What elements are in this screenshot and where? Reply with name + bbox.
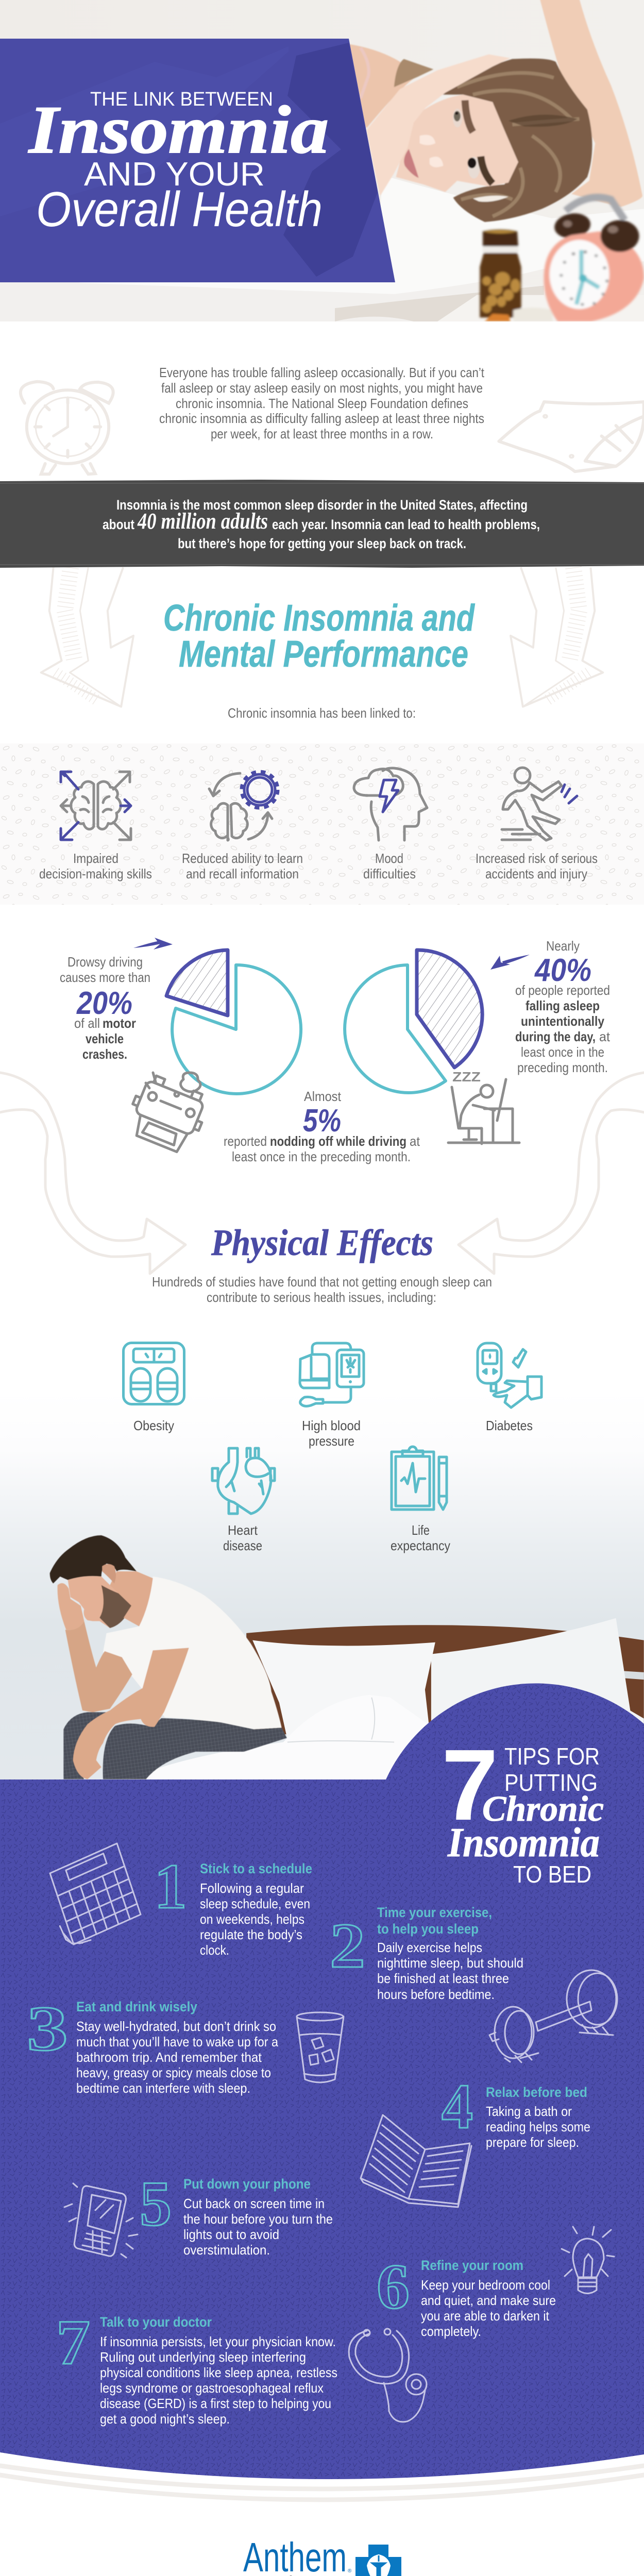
wall background behind lower effects — [0, 1391, 644, 1780]
tip 6: refine your room: completely. — [421, 2324, 481, 2339]
stat text: 5%: 5% — [303, 1103, 341, 1139]
label: heart disease: Heart — [228, 1522, 258, 1538]
icon: blood pressure monitor — [300, 1343, 364, 1406]
tip 7: talk to your doctor: If insomnia persists, let your physician know. — [100, 2334, 336, 2349]
faded brush strokes under tips panel — [0, 2466, 644, 2500]
tip 7: talk to your doctor: disease (GERD) is a first step to helping you — [100, 2396, 331, 2411]
label: high blood pressure: High blood — [302, 1418, 361, 1433]
icon: faded alarm clock — [21, 382, 113, 474]
label: impaired decision-making — [39, 851, 152, 882]
title text — [28, 89, 329, 237]
icon: weight scale — [124, 1343, 184, 1404]
label: reduced ability: Reduced ability to learn — [182, 851, 303, 866]
tip 6: refine your room — [377, 2251, 556, 2339]
intro paragraph: chronic insomnia as difficulty falling asleep at least three nights — [159, 411, 484, 426]
label: mood difficulties: Mood — [375, 851, 403, 866]
icon: clipboard with heartbeat — [392, 1447, 447, 1510]
heading: Chronic Insomnia and Mental Performance: Mental Performance — [179, 634, 468, 675]
label: diabetes: Diabetes — [486, 1418, 533, 1433]
heading: Chronic Insomnia and Mental Performance: Chronic Insomnia and — [163, 598, 476, 639]
label: increased risk: accidents and injury — [485, 866, 587, 882]
title text: Insomnia — [28, 92, 329, 167]
title panel — [0, 39, 395, 282]
subheading: Chronic insomnia has been linked to: — [228, 705, 416, 721]
physical effects intro: contribute to serious health issues, including: — [207, 1290, 436, 1305]
title text: THE LINK BETWEEN — [90, 89, 273, 110]
stat text: 40%: unintentionally — [521, 1013, 604, 1029]
arrow: pointing to 20% slice — [133, 938, 173, 950]
banner: 40 million adults: 40 million adults — [137, 509, 268, 534]
heading: 7 tips: TO BED — [513, 1861, 591, 1888]
intro paragraph: fall asleep or stay asleep easily on most nights, you might have — [161, 380, 483, 396]
faded curved arrow left — [0, 1073, 185, 1274]
photo: man sitting with head in hand — [50, 1535, 287, 1779]
label: heart disease: disease — [223, 1538, 262, 1553]
tip 7: talk to your doctor: get a good night’s sleep. — [100, 2411, 230, 2427]
stat text: 20%: 20% — [76, 986, 132, 1021]
icon: person asleep at desk — [448, 1069, 519, 1144]
tip 3: eat and drink wisely: bathroom trip. And remember that — [76, 2049, 262, 2065]
tip 3: eat and drink wisely: much that you’ll have to wake up for a — [76, 2034, 278, 2049]
tip 2: time your exercise: to help you sleep — [377, 1921, 479, 1937]
tip 6: refine your room: Keep your bedroom cool — [421, 2277, 550, 2293]
icon: glass of ice water — [297, 2012, 344, 2082]
tip 4: relax before bed: prepare for sleep. — [486, 2134, 579, 2150]
physical effects intro: Hundreds of studies have found that not getting enough sleep can — [152, 1274, 492, 1290]
tip 4: relax before bed — [442, 2071, 590, 2150]
stat text: 40%: at — [599, 1029, 611, 1044]
big faded arrow right — [511, 567, 603, 707]
icon: person slipping — [502, 768, 577, 840]
tip 3: eat and drink wisely — [27, 1993, 278, 2096]
tip 7: talk to your doctor — [56, 2307, 337, 2427]
tip 3: eat and drink wisely: Stay well-hydrated, but don’t drink so — [76, 2019, 276, 2034]
icon: open book — [361, 2115, 471, 2207]
banner: 40 million adults: about — [103, 517, 134, 532]
stat text: 20%: of all — [74, 1015, 100, 1031]
label: impaired decision-making: decision-making skills — [39, 866, 152, 882]
tip 3: eat and drink wisely: heavy, greasy or spicy meals close to — [76, 2065, 271, 2080]
intro paragraph: Everyone has trouble falling asleep occasionally. But if you can’t — [159, 365, 485, 380]
title text: Overall Health — [36, 182, 323, 237]
stat text: 40%: of people reported — [515, 982, 610, 998]
tip 1: stick to a schedule: Following a regular — [200, 1880, 304, 1896]
tip 1: stick to a schedule: 1 — [154, 1851, 187, 1922]
tip 5: put down your phone: the hour before you turn the — [183, 2211, 333, 2227]
icon: brain and gear — [209, 772, 277, 840]
label: increased risk — [476, 851, 598, 882]
arrow: pointing to 40% slice — [490, 955, 530, 970]
label: increased risk: Increased risk of serious — [476, 851, 598, 866]
big faded arrow left — [41, 567, 133, 707]
label: impaired decision-making: Impaired — [73, 851, 118, 866]
panel: 7 tips — [0, 1683, 644, 2500]
stat text: 40% — [515, 938, 611, 1075]
tip 2: time your exercise: Time your exercise, — [377, 1905, 492, 1920]
stat text: 40%: falling asleep — [526, 998, 600, 1013]
tip 5: put down your phone: overstimulation. — [183, 2242, 270, 2258]
heading: 7 tips: Insomnia — [447, 1820, 600, 1866]
heading: 7 tips — [442, 1728, 604, 1888]
stat text: 40%: preceding month. — [517, 1060, 608, 1075]
stat text: 5%: nodding off while driving — [270, 1133, 406, 1149]
icon: calendar — [43, 1843, 142, 1950]
label: reduced ability — [182, 851, 303, 882]
panel: linked conditions — [0, 743, 644, 905]
tip 1: stick to a schedule: sleep schedule, even — [200, 1896, 310, 1911]
pie chart: 40% falling asleep — [345, 950, 482, 1093]
tip 1: stick to a schedule: clock. — [200, 1942, 229, 1958]
tip 6: refine your room: and quiet, and make sure — [421, 2293, 556, 2308]
icon: person asleep at desk: ZZZ — [452, 1069, 481, 1084]
label: life expectancy: expectancy — [391, 1538, 450, 1553]
heading: Chronic Insomnia and Mental Performance — [163, 598, 476, 675]
stat text: 20% — [60, 954, 150, 1062]
label: life expectancy — [391, 1522, 450, 1553]
faded curved arrow right — [459, 1073, 644, 1274]
label: heart disease — [223, 1522, 262, 1553]
intro paragraph — [159, 365, 485, 442]
stat text: 40%: 40% — [534, 953, 591, 988]
stat text: 5%: Almost — [304, 1089, 342, 1104]
tip 5: put down your phone: Cut back on screen time in — [183, 2196, 325, 2211]
icon: light bulb — [562, 2227, 614, 2294]
icon: faded pillow — [499, 402, 644, 471]
photo: bed with pillows — [127, 1618, 644, 1780]
tip 4: relax before bed: Taking a bath or — [486, 2104, 572, 2119]
tip 7: talk to your doctor: Talk to your doctor — [100, 2314, 212, 2330]
icon: heart — [212, 1448, 275, 1514]
heading: Physical Effects: Physical Effects — [211, 1222, 433, 1263]
tip 1: stick to a schedule — [154, 1851, 312, 1958]
heading: 7 tips: PUTTING — [504, 1769, 598, 1796]
label: high blood pressure — [302, 1418, 361, 1449]
tip 2: time your exercise: nighttime sleep, but should — [377, 1955, 523, 1971]
heading: 7 tips: TIPS FOR — [504, 1743, 600, 1770]
stat text: 40%: least once in the — [521, 1044, 604, 1060]
tip 5: put down your phone: lights out to avoid — [183, 2227, 279, 2242]
stat text: 20%: Drowsy driving — [67, 954, 143, 970]
tip 2: time your exercise: Daily exercise helps — [377, 1940, 482, 1955]
tip 1: stick to a schedule: on weekends, helps — [200, 1911, 304, 1927]
tip 3: eat and drink wisely: 3 — [27, 1993, 68, 2064]
tip 1: stick to a schedule: Stick to a schedule — [200, 1861, 312, 1876]
stat text: 20%: crashes. — [82, 1046, 127, 1062]
label: obesity: Obesity — [133, 1418, 174, 1433]
label: mood difficulties — [363, 851, 416, 882]
stat text: 5% — [224, 1089, 420, 1164]
tip 4: relax before bed: 4 — [442, 2071, 473, 2142]
banner: 40 million adults: Insomnia is the most common sleep disorder in the United States, affecting — [116, 497, 528, 513]
tip 7: talk to your doctor: 7 — [56, 2307, 90, 2378]
icon: brain with arrows — [61, 772, 131, 840]
stat text: 5%: at — [410, 1133, 420, 1149]
tip 7: talk to your doctor: physical conditions like sleep apnea, restless — [100, 2365, 337, 2380]
tip 6: refine your room: Refine your room — [421, 2258, 523, 2273]
icon: glucose meter and hand — [478, 1343, 541, 1408]
tip 2: time your exercise — [330, 1905, 523, 2002]
tip 6: refine your room: you are able to darken it — [421, 2308, 550, 2324]
pie chart: 20% drowsy driving — [166, 950, 301, 1094]
icon: dumbbell — [489, 1970, 617, 2062]
tip 5: put down your phone: 5 — [140, 2168, 172, 2239]
tip 5: put down your phone: Put down your phone — [183, 2176, 311, 2192]
tip 7: talk to your doctor: legs syndrome or gastroesophageal reflux — [100, 2380, 324, 2396]
label: reduced ability: and recall information — [186, 866, 299, 882]
stat text: 20%: vehicle — [86, 1031, 124, 1046]
intro paragraph: chronic insomnia. The National Sleep Foundation defines — [176, 396, 468, 411]
tip 6: refine your room: 6 — [377, 2251, 410, 2322]
banner: 40 million adults: each year. Insomnia can lead to health problems, — [272, 517, 540, 532]
stat text: 5%: least once in the preceding month. — [232, 1149, 411, 1164]
title text: AND YOUR — [84, 155, 265, 193]
intro paragraph: per week, for at least three months in a row. — [211, 426, 433, 442]
hero photo: woman in bed with alarm clock and pill bottle — [0, 0, 644, 321]
tip 7: talk to your doctor: Ruling out underlying sleep interfering — [100, 2349, 306, 2365]
tip 5: put down your phone — [140, 2168, 333, 2258]
tip 2: time your exercise: be finished at least three — [377, 1971, 509, 1986]
tip 2: time your exercise: 2 — [330, 1910, 365, 1981]
banner: 40 million adults: but there’s hope for getting your sleep back on track. — [178, 536, 466, 551]
icon: head with storm cloud — [354, 768, 427, 840]
icon: smoke and impact lines — [146, 1073, 200, 1096]
stat text: 5%: reported — [224, 1133, 267, 1149]
tip 4: relax before bed: reading helps some — [486, 2119, 590, 2134]
tip 1: stick to a schedule: regulate the body’s — [200, 1927, 302, 1942]
tip 2: time your exercise: hours before bedtime. — [377, 1987, 495, 2002]
stat text: 40%: Nearly — [546, 938, 580, 954]
heading: 7 tips: Chronic — [482, 1789, 604, 1829]
stat text: 40%: during the day, — [515, 1029, 596, 1044]
tip 3: eat and drink wisely: Eat and drink wisely — [76, 1999, 197, 2014]
icon: mobile phone — [64, 2183, 138, 2258]
tip 4: relax before bed: Relax before bed — [486, 2084, 587, 2100]
logo: Anthem BlueCross: ® — [348, 2568, 352, 2574]
label: life expectancy: Life — [412, 1522, 430, 1538]
banner: 40 million adults — [0, 480, 644, 568]
stat text: 20%: causes more than — [60, 970, 150, 985]
icon: overturned car — [122, 1072, 212, 1157]
tip 3: eat and drink wisely: bedtime can interfere with sleep. — [76, 2080, 250, 2096]
heading: 7 tips: 7 — [442, 1728, 498, 1841]
stat text: 20%: motor — [103, 1015, 136, 1031]
icon: stethoscope — [349, 2329, 427, 2422]
physical effects intro — [152, 1274, 492, 1305]
label: mood difficulties: difficulties — [363, 866, 416, 882]
label: high blood pressure: pressure — [309, 1433, 354, 1449]
